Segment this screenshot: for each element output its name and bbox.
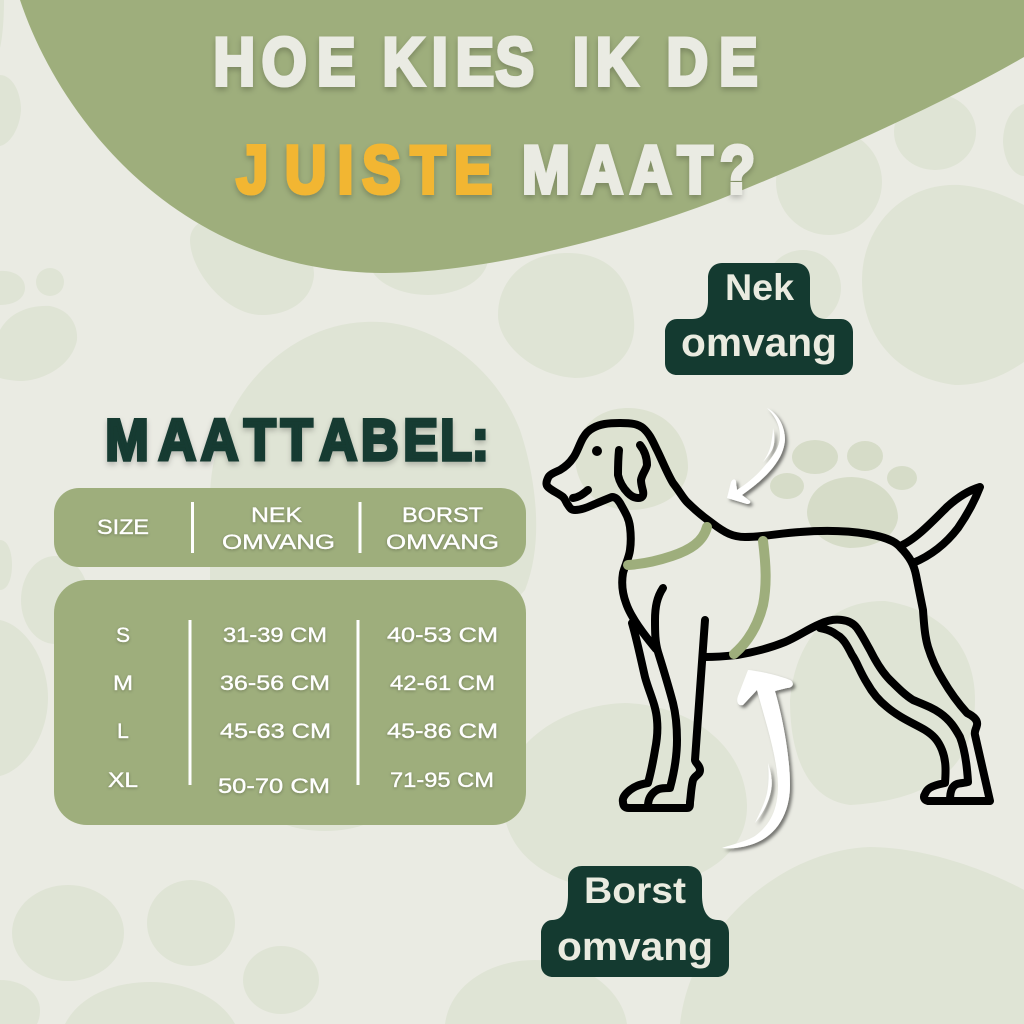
table body panel: 50-70 CM — [218, 775, 330, 798]
label: nek omvang: omvang — [681, 321, 837, 365]
chest measurement line — [734, 541, 766, 654]
table body panel: 40-53 CM — [387, 624, 498, 647]
title — [213, 25, 758, 208]
neck measurement line — [628, 527, 707, 565]
table body panel: 31-39 CM — [223, 624, 327, 647]
dog ear — [618, 445, 647, 498]
dog belly and inner rear leg — [705, 620, 968, 801]
label: nek omvang: Nek — [725, 267, 794, 308]
paw print near tail — [770, 440, 917, 548]
table body panel: 45-86 CM — [387, 720, 498, 743]
dog tail — [900, 487, 980, 563]
table header panel — [54, 488, 526, 567]
label: borst omvang: Borst — [584, 870, 686, 911]
dog back and rear leg — [620, 423, 990, 801]
label: nek omvang — [665, 263, 853, 375]
table body panel: 36-56 CM — [220, 672, 330, 695]
label: borst omvang: omvang — [557, 925, 713, 969]
table body panel: 45-63 CM — [220, 720, 331, 743]
dog mouth — [573, 490, 588, 498]
title: MAAT? — [502, 133, 755, 208]
table header panel: BORST — [402, 504, 483, 527]
dog eye — [592, 446, 602, 456]
table body panel: S — [116, 624, 130, 647]
arrow: chest — [722, 670, 793, 848]
table header panel: SIZE — [97, 516, 149, 539]
title: HOE KIES IK DE — [213, 25, 758, 100]
table header panel: NEK — [251, 504, 302, 527]
arrow: neck — [727, 408, 785, 504]
dog nose — [552, 480, 556, 484]
dog near front leg — [623, 620, 705, 808]
table body panel — [54, 580, 526, 825]
table body panel: L — [117, 720, 129, 743]
heading: maattabel: MAATTABEL: — [105, 407, 489, 473]
dog far front leg — [648, 588, 677, 806]
dog head and chest — [546, 423, 656, 649]
label: borst omvang — [541, 866, 729, 977]
title: JUISTE — [236, 133, 492, 208]
table body panel: M — [113, 672, 133, 695]
table header panel: OMVANG — [386, 531, 499, 554]
table body panel: 71-95 CM — [390, 769, 494, 792]
table body panel: 42-61 CM — [390, 672, 495, 695]
table header panel: OMVANG — [222, 531, 335, 554]
header shape — [20, 0, 1024, 273]
table body panel: XL — [108, 769, 138, 792]
dog illustration — [546, 423, 990, 808]
